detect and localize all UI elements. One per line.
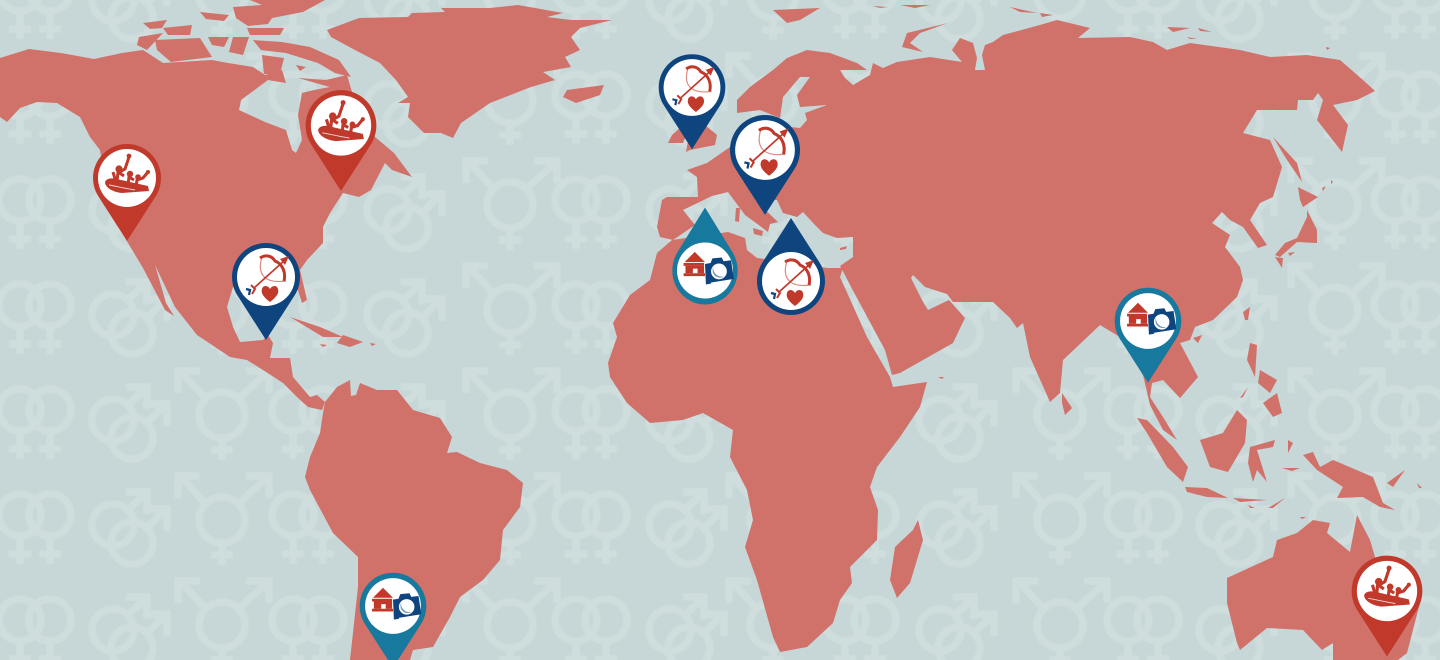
islands: East Asia [1193,137,1333,343]
islands: Southeast Asia [1137,343,1285,508]
Caribbean islands [290,317,376,347]
islands: New Guinea and Pacific [1282,440,1422,519]
continent: Eurasia [657,20,1375,440]
islands: Britain and Ireland [668,118,717,152]
continent: South America [305,380,523,660]
continent: North and Central America [0,49,412,410]
pin: rafting, western USA [93,144,161,241]
pin: sightseeing, North Africa [672,208,738,304]
pin: romance, Egypt [757,218,825,315]
islands: Sri Lanka, Socotra [938,377,1072,415]
pin: sightseeing, Southeast Asia [1115,288,1181,383]
island: Iceland [563,85,604,103]
pin: rafting, eastern Canada [306,90,376,191]
pin: romance, Gulf of Mexico [232,243,300,340]
pin: romance, Britain [659,54,725,149]
continent: Australia [1227,515,1420,660]
islands: Arctic Ocean [773,5,1330,52]
pin: sightseeing, South America [360,573,426,660]
islands: Mediterranean [735,208,847,250]
pin: rafting, Australia [1352,556,1422,657]
continent: Africa [608,232,927,652]
islands: Canadian Arctic [137,0,351,77]
island: Greenland [327,5,612,138]
island: Madagascar [890,520,923,598]
pin: romance, Italy [730,115,800,215]
